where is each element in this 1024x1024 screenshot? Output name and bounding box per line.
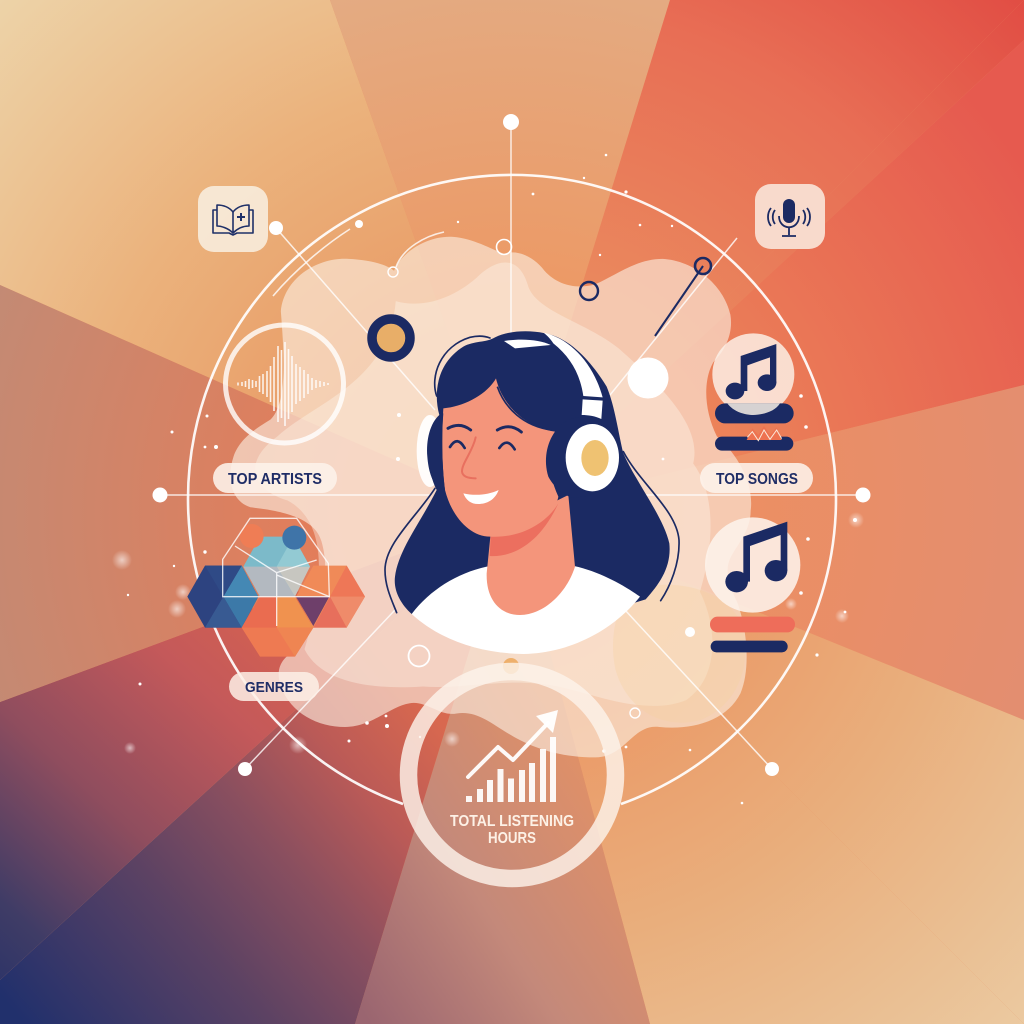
icon: music note with lines: [705, 517, 800, 652]
label: top artists: [213, 463, 337, 493]
left ear pad glow: [417, 415, 443, 487]
shirt: [412, 566, 640, 654]
label: top songs: [700, 463, 813, 493]
badge text: TOTAL LISTENING: [450, 813, 574, 830]
icon: microphone tile: [755, 184, 825, 249]
label: top artists: TOP ARTISTS: [228, 471, 322, 488]
badge text: [450, 813, 574, 847]
icon: genre hexagons: [187, 518, 365, 657]
label: genres: GENRES: [245, 679, 303, 696]
nose: [462, 437, 476, 478]
connector lines and nodes: [152, 114, 870, 776]
bar chart: [466, 737, 556, 802]
hair: [395, 331, 670, 620]
icon: gold ring: [372, 319, 410, 357]
neck shadow: [490, 503, 558, 556]
icon: waveform circle: [226, 325, 344, 443]
smile: [463, 490, 499, 504]
right ear cup: [546, 417, 620, 498]
label: genres: [229, 672, 319, 701]
eyebrows and eyes: [448, 425, 521, 449]
label: top songs: TOP SONGS: [716, 471, 798, 488]
face: [442, 378, 558, 537]
headband: [504, 333, 603, 397]
neck: [487, 495, 575, 615]
badge text: HOURS: [488, 830, 536, 847]
fringe strand: [497, 387, 552, 430]
trend arrow: [468, 710, 558, 777]
cloud shapes behind the portrait: [230, 237, 751, 757]
hair outlines: [385, 336, 679, 613]
portrait: person with headphones: [385, 331, 679, 654]
left ear cup: [427, 413, 445, 490]
icon: music note with bars: [712, 333, 794, 451]
sparkles: [112, 154, 864, 804]
icon: book tile: [198, 186, 268, 252]
total listening hours badge: [408, 672, 616, 878]
main ring: [188, 175, 836, 804]
